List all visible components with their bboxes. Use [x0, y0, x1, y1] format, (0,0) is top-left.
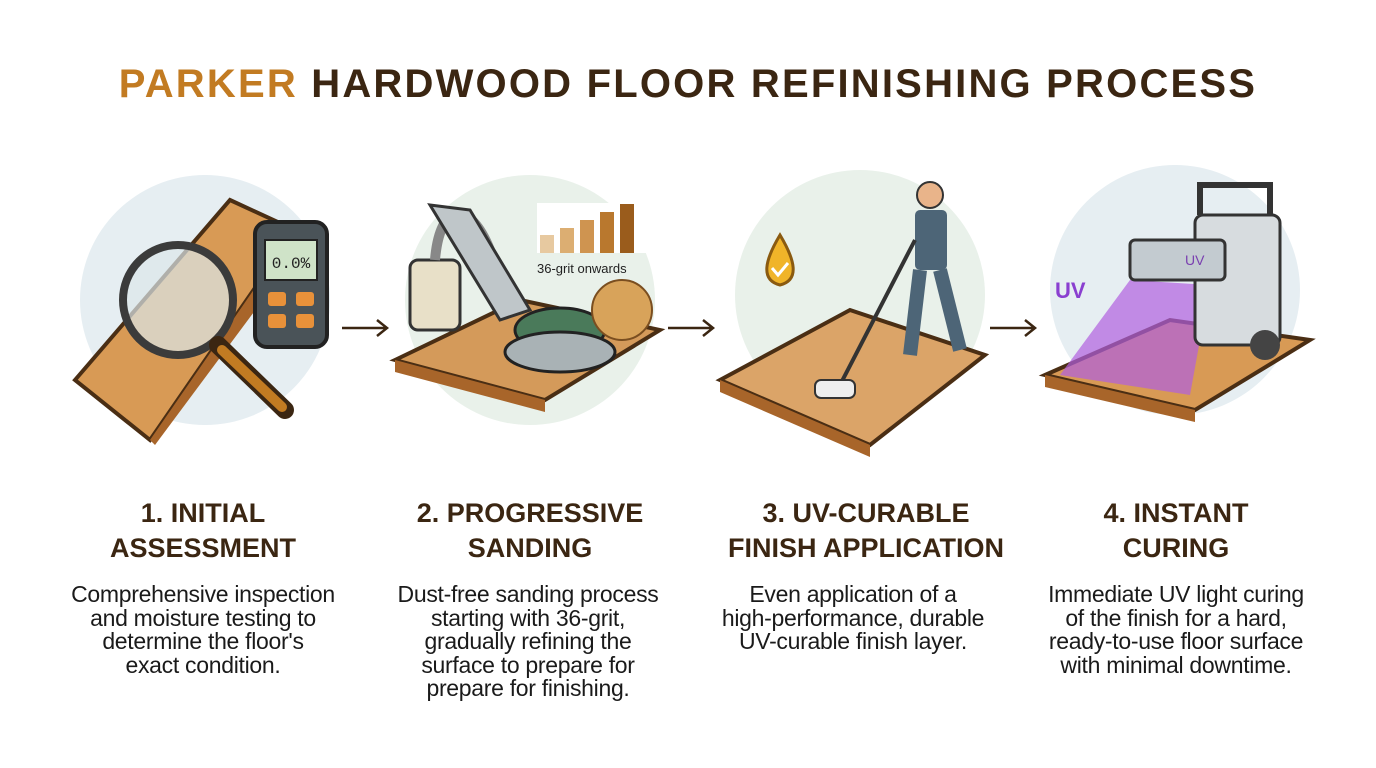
- icon: step 1 assessment: 0.0%: [272, 255, 311, 273]
- icon: step 1 assessment: [75, 175, 330, 445]
- text 1: and moisture testing to: [90, 604, 316, 630]
- text 4: [1048, 581, 1304, 678]
- icon: step 3 finish application: [720, 170, 985, 457]
- illustrations: [72, 165, 1316, 457]
- icon: step 2 sanding: 36-grit onwards: [537, 261, 627, 276]
- heading 1: ASSESSMENT: [110, 533, 296, 563]
- heading 2: 2. PROGRESSIVE: [417, 498, 643, 528]
- text 3: [722, 581, 984, 654]
- text 3: Even application of a: [749, 581, 957, 607]
- heading 2: SANDING: [468, 533, 592, 563]
- text 2: [398, 581, 658, 701]
- text 2: starting with 36-grit,: [431, 604, 625, 630]
- arrow 3: [990, 320, 1035, 336]
- text 2: surface to prepare for: [421, 652, 635, 678]
- text 2: prepare for finishing.: [426, 675, 630, 701]
- text 1: exact condition.: [125, 652, 281, 678]
- heading 3: 3. UV-CURABLE: [762, 498, 970, 528]
- icon: step 4 UV curing: UV: [1055, 278, 1086, 303]
- text 2: Dust-free sanding process: [398, 581, 658, 607]
- heading 3: [728, 498, 1004, 563]
- heading 4: CURING: [1123, 533, 1229, 563]
- heading 3: FINISH APPLICATION: [728, 533, 1004, 563]
- heading 1: 1. INITIAL: [141, 498, 265, 528]
- heading 4: [1103, 498, 1248, 563]
- text 3: UV-curable finish layer.: [739, 628, 967, 654]
- heading 1: [110, 498, 296, 563]
- heading 4: 4. INSTANT: [1103, 498, 1248, 528]
- icon: step 4 UV curing: UV: [1185, 252, 1205, 268]
- text 4: ready-to-use floor surface: [1049, 628, 1303, 654]
- text 3: high-performance, durable: [722, 604, 984, 630]
- text 1: [71, 581, 335, 678]
- text 2: gradually refining the: [425, 628, 631, 654]
- text 4: of the finish for a hard,: [1065, 604, 1287, 630]
- text 4: with minimal downtime.: [1060, 652, 1292, 678]
- arrow 2: [668, 320, 713, 336]
- text 4: Immediate UV light curing: [1048, 581, 1304, 607]
- text 1: determine the floor's: [102, 628, 304, 654]
- arrow 1: [342, 320, 387, 336]
- text 1: Comprehensive inspection: [71, 581, 335, 607]
- title: PARKER HARDWOOD FLOOR REFINISHING PROCESS: [119, 62, 1257, 106]
- heading 2: [417, 498, 643, 563]
- icon: step 2 sanding: [395, 175, 660, 425]
- icon: step 4 UV curing: [1045, 165, 1310, 422]
